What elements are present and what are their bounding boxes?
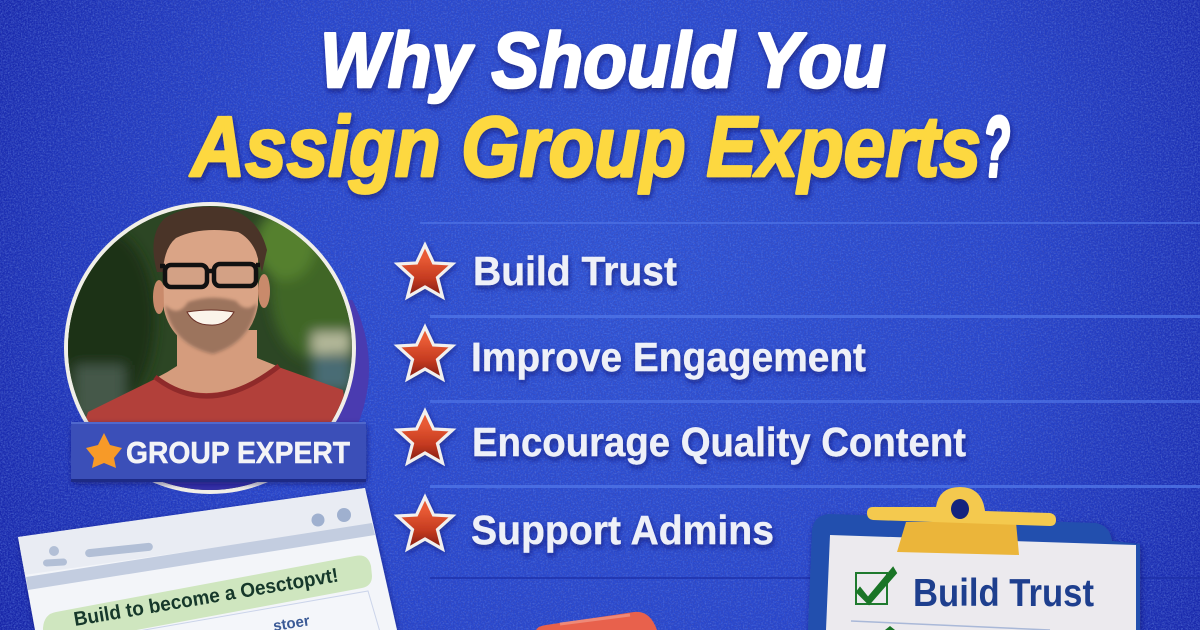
checkmark item	[856, 568, 1094, 615]
item: support admins: Support Admins	[471, 507, 774, 553]
backing visible below badge	[163, 482, 257, 490]
item: improve engagement: Improve Engagement	[471, 334, 866, 380]
purple offset disc	[336, 300, 369, 422]
collar	[155, 366, 279, 396]
clipboard back layers	[808, 514, 1140, 630]
glasses	[160, 264, 260, 287]
banner text: Build to become a Oesctopvt!	[72, 565, 340, 630]
ears	[153, 280, 165, 314]
green message banner	[43, 555, 372, 630]
hair	[153, 207, 267, 272]
item: support admins	[398, 497, 774, 553]
card header band	[18, 488, 372, 575]
avatar and name placeholder	[43, 508, 351, 567]
item: encourage quality content: Encourage Quality Content	[472, 419, 966, 465]
title line 1: Why Should You	[320, 16, 886, 104]
clip	[867, 487, 1056, 555]
title	[189, 16, 1010, 195]
badge label: GROUP EXPERT	[126, 435, 350, 470]
photo	[68, 206, 352, 490]
clipboard	[808, 487, 1140, 630]
browser card mockup	[18, 488, 397, 630]
title line 2 highlighted: Assign Group Experts	[189, 100, 981, 195]
item: build trust	[398, 245, 677, 297]
portrait ring	[64, 202, 356, 494]
badge: group expert	[71, 422, 366, 482]
inner reply box	[133, 591, 380, 630]
icon: orange star	[86, 433, 122, 468]
red button fragment	[536, 612, 657, 630]
item: build trust: Build Trust	[473, 248, 677, 294]
shirt	[86, 368, 344, 422]
expert portrait	[55, 200, 369, 515]
stubble	[165, 298, 257, 354]
question mark: ?	[983, 100, 1010, 195]
divider and next check	[851, 621, 1050, 630]
face	[164, 230, 258, 336]
clipboard paper	[826, 535, 1136, 630]
benefits list	[398, 245, 966, 553]
neck	[158, 330, 277, 393]
checkmark item: Build Trust	[913, 572, 1094, 615]
smile	[187, 310, 234, 325]
